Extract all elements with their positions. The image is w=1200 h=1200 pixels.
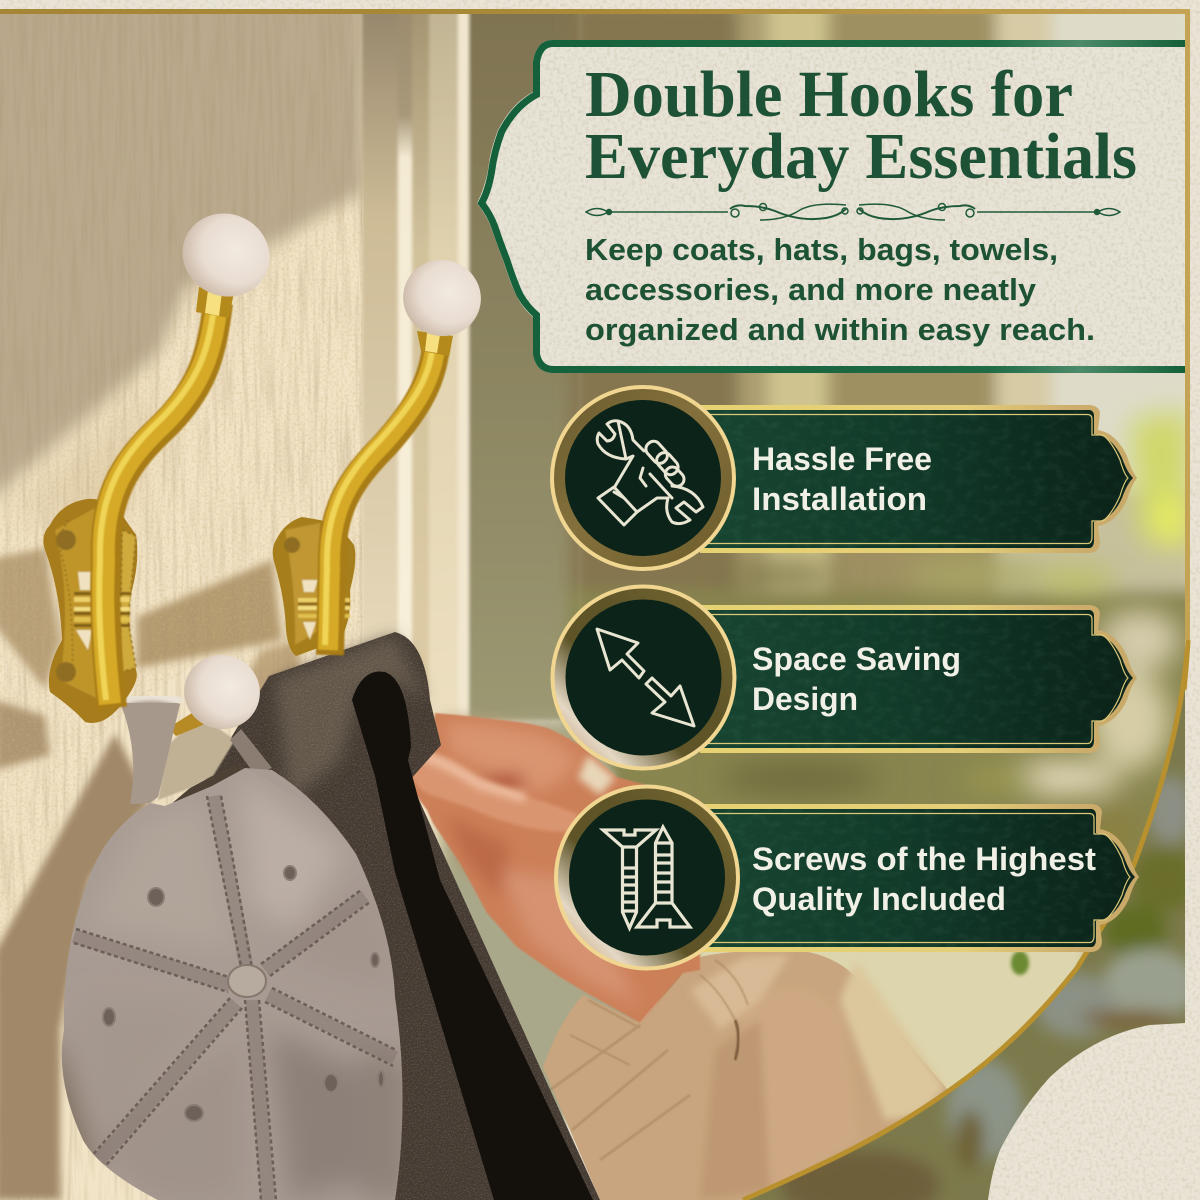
medallion (552, 387, 734, 569)
icon: screws (603, 827, 690, 928)
feature 1: hassle free installation (552, 387, 1140, 569)
collar (196, 287, 234, 318)
label (752, 641, 961, 717)
plate (43, 499, 137, 723)
title (585, 58, 1137, 193)
sleeve (543, 950, 948, 1200)
blurred background behind banners (440, 0, 1200, 1200)
gold curve (743, 640, 1188, 1200)
lower curve outer segment (1184, 640, 1188, 690)
stem (99, 303, 218, 708)
collar (417, 331, 453, 356)
knob (182, 214, 270, 296)
description: organized and within easy reach. (585, 312, 1095, 347)
medallion (552, 586, 734, 768)
top and right frame line (0, 12, 1188, 640)
label: Design (752, 681, 858, 717)
banner (702, 804, 1142, 954)
banner (700, 605, 1140, 755)
label (752, 841, 1096, 917)
medallion (556, 786, 738, 968)
banner (700, 405, 1140, 555)
icon: hand with wrench (597, 421, 703, 525)
wall (0, 194, 441, 1200)
feature 2: space saving design (552, 586, 1140, 768)
hook 2 (273, 249, 492, 656)
shadow cast by hook 1 (137, 560, 282, 668)
label: Installation (752, 481, 927, 517)
label (752, 441, 932, 517)
label: Space Saving (752, 641, 961, 677)
description: Keep coats, hats, bags, towels, (585, 232, 1058, 267)
knob (403, 260, 481, 336)
hook 3 knob (184, 655, 260, 729)
sun and shadow on wall (0, 0, 365, 510)
paper corner (988, 1023, 1185, 1200)
window frame (362, 0, 579, 720)
feature 3: screws included (556, 786, 1142, 968)
title: Double Hooks for (585, 58, 1073, 131)
wall texture (0, 13, 362, 1200)
towel (200, 625, 600, 1200)
hook 1 (43, 199, 283, 723)
description: accessories, and more neatly (585, 272, 1037, 307)
label: Quality Included (752, 881, 1006, 917)
icon: diagonal arrows (597, 629, 694, 726)
ornamental divider (586, 204, 1120, 220)
frosted outer photo edge (749, 690, 1185, 1200)
cap button (228, 965, 266, 997)
cap seams (74, 796, 395, 1200)
cap eyelets (103, 866, 384, 1121)
label: Screws of the Highest (752, 841, 1096, 877)
label: Hassle Free (752, 441, 932, 477)
header panel (470, 36, 1190, 376)
cap strap (119, 697, 272, 805)
hand (406, 713, 700, 1023)
plate (273, 517, 355, 656)
wall patch inside cap loop (158, 724, 234, 800)
title: Everyday Essentials (585, 120, 1137, 193)
stem (325, 340, 437, 655)
third hook stem (173, 713, 204, 736)
baseball cap (40, 768, 410, 1200)
description (585, 232, 1095, 347)
